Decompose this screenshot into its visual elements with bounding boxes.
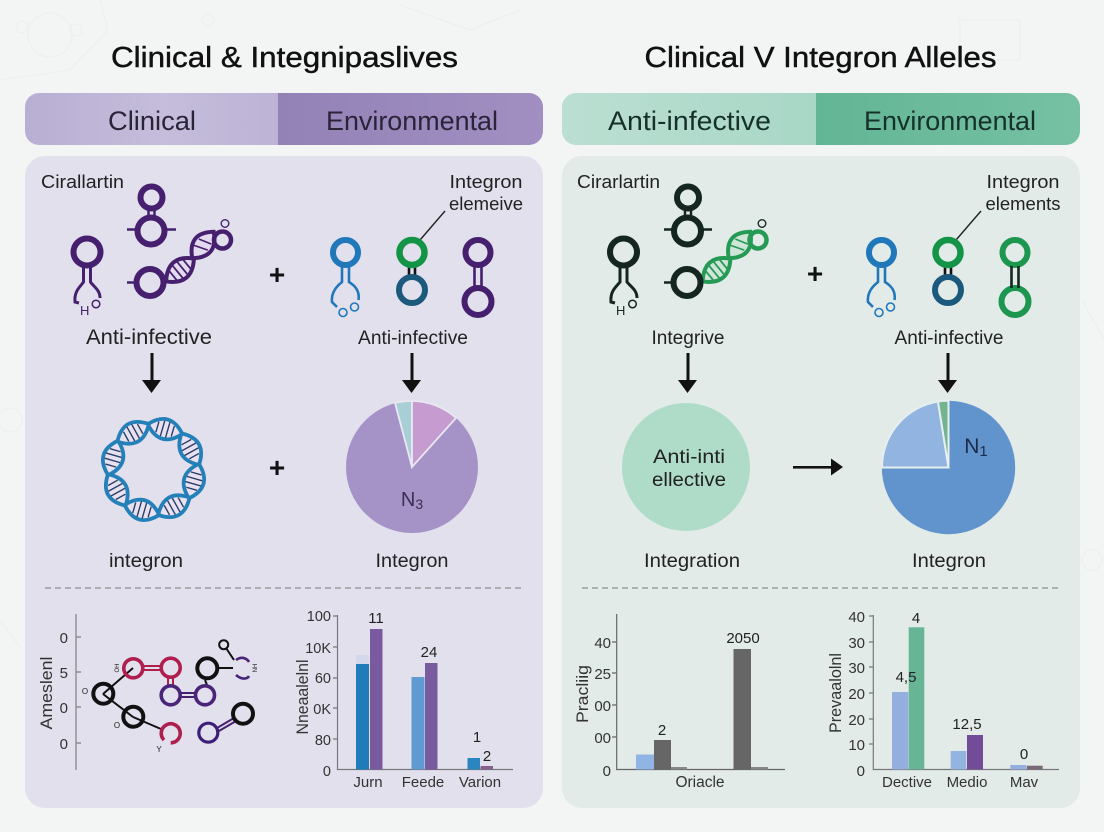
chart: bars Oriacle: Pracliig [574,665,592,723]
chart: bars Dective Medio Mav: 10 [848,737,865,754]
chart: bars Dective Medio Mav: 4,5 [896,669,916,686]
header bar: left: Clinical [108,106,196,136]
chart: bars Jurn Feede Varion: 11 [368,610,384,627]
chart: bars Dective Medio Mav: 0 [857,763,865,780]
pie chart: left [346,401,478,533]
chart: bars Jurn Feede Varion: Jurn [353,774,383,791]
chart: bars Jurn Feede Varion: 80 [315,733,331,749]
chart: bars Oriacle [574,614,785,791]
label: integron elements [956,172,1060,240]
green circle: ellective [652,470,726,491]
chart: bars Jurn Feede Varion: 10K [305,641,331,657]
label: integron elements: Integron [986,172,1060,192]
icon: molecule with green helix [664,220,766,296]
arrow [678,353,697,393]
label: cirallartin: Cirallartin [41,172,124,192]
chart: bars Dective Medio Mav: 20 [848,712,865,729]
chart: bars Oriacle: 00 [594,730,611,747]
pie chart: right: 1 [979,443,988,460]
pie chart: right: N [964,435,979,458]
chart: bars Jurn Feede Varion: 0K [313,702,331,718]
icon: blue molecule [332,240,359,316]
label: cirarlartin: Cirarlartin [577,172,660,192]
plus: + [807,258,823,289]
label: anti-infective left: Anti-infective [86,326,212,349]
arrow [938,353,957,393]
icon: molecule left: H [80,303,89,318]
chart: bars Jurn Feede Varion: 60 [315,671,331,687]
chart: molecule network: NH [253,664,259,672]
chart: molecule network: Y [156,745,162,754]
label: integron: Integron [912,551,986,572]
chart: bars Oriacle: 2 [658,722,666,739]
header bar: right [562,93,1080,145]
chart: bars Dective Medio Mav: 20 [848,686,865,703]
label: integron elemeive: Integron [450,172,522,192]
chart: bars Oriacle: Oriacle [675,774,725,791]
label: integron elemeive: elemeive [449,194,523,214]
chart: bars Jurn Feede Varion: 2 [483,748,491,765]
chart: bars Jurn Feede Varion: 1 [473,729,481,746]
chart: molecule network: O [82,687,88,696]
chart: molecule network: 0 [60,736,68,753]
green circle: Anti-inti [653,447,725,468]
header bar: left: Environmental [326,106,498,136]
icon: purple molecule [464,240,492,315]
chart: molecule network: 5 [60,665,68,682]
chart: bars Dective Medio Mav: 4 [912,610,920,627]
chart: bars Jurn Feede Varion: Nneaalelnl [294,660,312,734]
chart: bars Dective Medio Mav: Prevaalolnl [827,653,845,733]
icon: molecule with helix [127,220,231,296]
plus: + [269,259,285,290]
arrow [402,353,421,393]
icon: green molecule [1002,240,1028,315]
pie chart: left: 3 [415,496,423,512]
arrow [793,458,843,476]
label: integron elements: elements [986,194,1060,214]
panel: right [562,156,1080,808]
icon: molecule top [664,186,712,244]
chart: molecule network [38,614,259,770]
chart: bars Oriacle: 40 [594,635,611,652]
label: integron elemeive [420,172,523,240]
chart: bars Dective Medio Mav: 12,5 [952,716,982,733]
chart: bars Oriacle: 2050 [726,630,760,647]
pie chart: left: N [401,489,415,511]
label: anti-infective right: Anti-infective [358,328,468,349]
chart: bars Dective Medio Mav: 40 [848,609,865,626]
chart: bars Dective Medio Mav: 30 [848,660,865,677]
chart: bars Oriacle: 0 [603,763,611,780]
icon: green and teal molecule [399,240,425,303]
header bar: left [25,93,543,145]
chart: bars Jurn Feede Varion: Feede [402,774,444,791]
label: integrive: Integrive [652,328,724,349]
plus: + [269,452,285,483]
chart: bars Dective Medio Mav: Dective [882,774,932,791]
chart: bars Dective Medio Mav [827,609,1059,791]
icon: circular DNA [99,415,208,524]
panel: left [25,156,543,808]
header bar: right: Anti-infective [608,106,771,136]
chart: molecule network: Ameslenl [38,656,56,730]
chart: bars Jurn Feede Varion: Varion [459,774,501,791]
chart: bars Dective Medio Mav: 0 [1020,746,1028,763]
chart: bars Dective Medio Mav: Mav [1010,774,1039,791]
green circle [622,403,750,531]
chart: molecule network: O [114,721,120,730]
chart: bars Jurn Feede Varion: 100 [307,609,331,625]
icon: molecule left [610,238,637,318]
label: integration: Integration [644,551,740,572]
chart: bars Oriacle: 00 [594,698,611,715]
title: right: Clinical V Integron Alleles [644,42,996,74]
icon: molecule left [74,238,100,318]
label: integron: integron [109,551,183,572]
title: left: Clinical & Integnipaslives [111,42,458,74]
chart: molecule network: 0 [60,630,68,647]
icon: molecule top [127,186,176,244]
chart: bars Jurn Feede Varion [294,609,513,791]
chart: bars Dective Medio Mav: Medio [947,774,987,791]
chart: bars Jurn Feede Varion: 24 [421,644,437,661]
icon: molecule left: H [616,303,625,318]
icon: blue molecule [868,240,895,316]
pie chart: right [882,401,1015,534]
chart: molecule network: 0 [60,700,68,717]
header bar: right: Environmental [864,106,1036,136]
chart: bars Dective Medio Mav: 30 [848,635,865,652]
chart: bars Oriacle: 25 [594,666,611,683]
label: anti-infective: Anti-infective [894,328,1004,349]
icon: green and teal molecule [935,240,961,303]
chart: molecule network: OH [115,664,121,672]
arrow [142,353,161,393]
chart: bars Jurn Feede Varion: 0 [323,764,331,780]
label: integron: Integron [376,551,448,572]
